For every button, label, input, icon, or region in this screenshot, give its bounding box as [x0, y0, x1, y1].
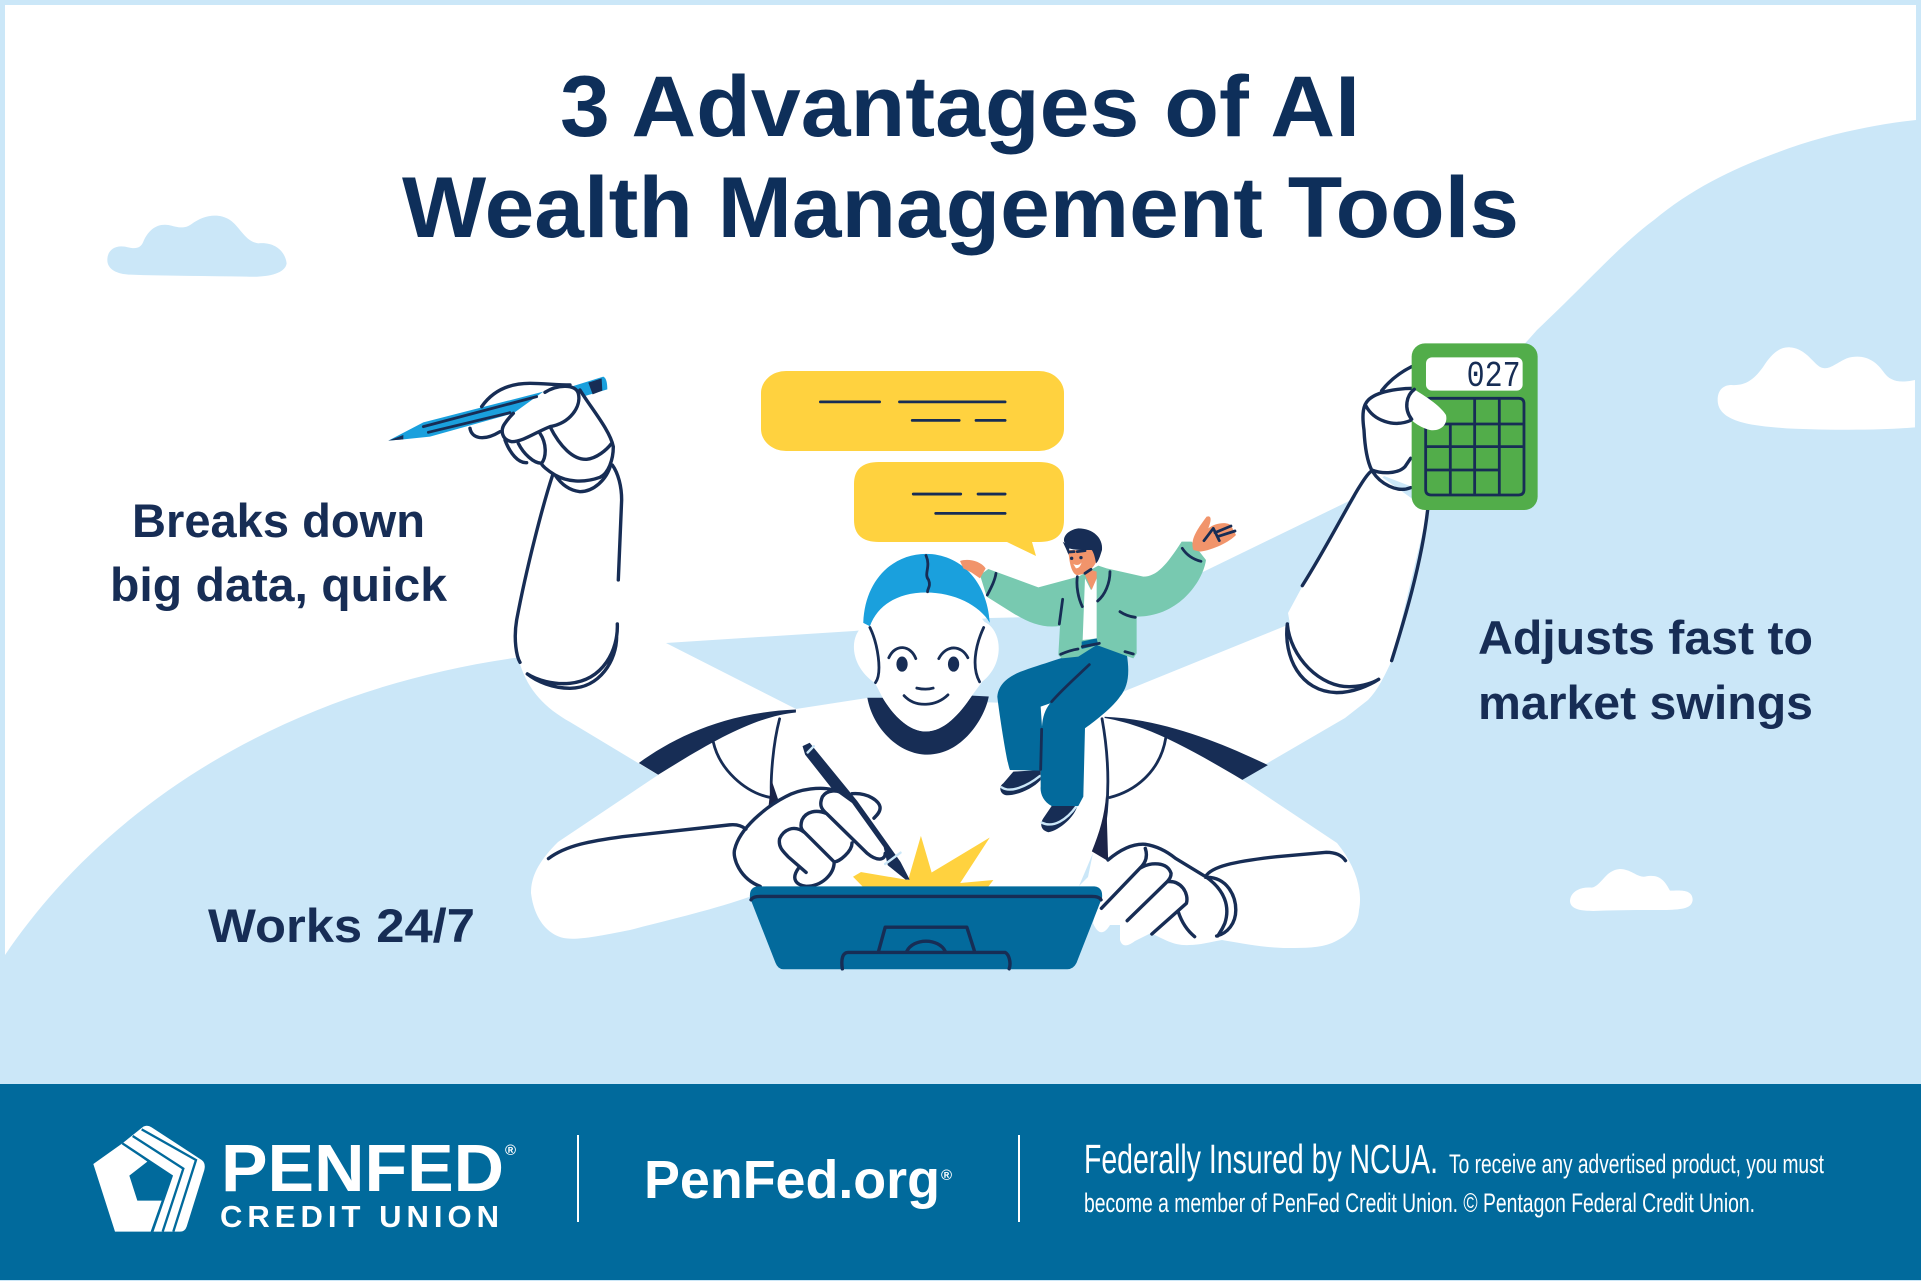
thumb over calculator — [1406, 389, 1446, 430]
cloud: upper left — [107, 216, 287, 277]
label: adjusts fast to market swings: Adjusts fast to — [1478, 611, 1813, 664]
pencil — [388, 377, 607, 441]
hand outlines — [470, 383, 613, 492]
label: adjusts fast to market swings — [1478, 611, 1813, 729]
logo mark — [93, 1126, 205, 1232]
tablet — [750, 886, 1102, 969]
speech bubble: bottom — [854, 462, 1064, 556]
logo wordmark: PENFED — [221, 1131, 504, 1206]
trousers — [997, 645, 1128, 806]
label: breaks down big data — [110, 494, 448, 611]
logo wordmark: CREDIT UNION — [220, 1199, 499, 1234]
head cap — [863, 554, 990, 626]
raised hand with pencil — [388, 377, 622, 688]
shirt and belt — [1083, 578, 1097, 640]
upper arm outline — [515, 465, 622, 688]
logo wordmark: ® — [505, 1142, 516, 1159]
nose and smile — [904, 688, 948, 704]
website: PenFed.org — [644, 1150, 940, 1210]
right shoulder band — [1105, 717, 1268, 780]
divider — [577, 1135, 579, 1222]
shoes — [1000, 770, 1078, 832]
robot head and torso details — [639, 554, 1268, 861]
robot body and arms silhouette — [515, 470, 1428, 948]
calculator: 027 — [1467, 356, 1521, 397]
title: Wealth Management Tools — [402, 160, 1519, 256]
cloud: right — [1718, 347, 1915, 430]
head seam — [926, 556, 929, 592]
hand and arm outline — [1363, 367, 1412, 487]
hand holding stylus — [548, 743, 910, 886]
face and ears — [854, 593, 999, 731]
disclaimer — [1084, 1136, 1824, 1218]
forearm line — [548, 825, 746, 859]
jacket creases — [987, 548, 1201, 654]
raised hand with calculator — [1287, 343, 1538, 693]
starburst — [846, 836, 993, 891]
label: works 24/7: Works 24/7 — [208, 899, 475, 952]
left shoulder band — [639, 710, 796, 775]
cloud: small lower right — [1570, 869, 1693, 911]
hands — [960, 516, 1236, 578]
hand outlines — [734, 788, 885, 886]
divider — [1018, 1135, 1020, 1222]
shoulder seams — [713, 719, 1166, 841]
small sky wedge beside the torso — [1079, 853, 1093, 886]
eyes and brows — [889, 648, 968, 672]
collar — [867, 696, 989, 755]
footer band — [0, 1084, 1921, 1280]
disclaimer: Federally Insured by NCUA. — [1084, 1136, 1438, 1182]
logo wordmark — [220, 1131, 516, 1234]
label: adjusts fast to market swings: market swings — [1478, 676, 1813, 729]
armpit shadows — [768, 780, 1108, 861]
head — [1068, 550, 1099, 590]
website: ® — [941, 1167, 952, 1184]
title: 3 Advantages of AI — [560, 59, 1360, 155]
label: breaks down big data: Breaks down — [132, 494, 425, 547]
ear lines — [870, 627, 984, 683]
speech bubble: top — [761, 371, 1064, 451]
man sitting on robot shoulder — [960, 516, 1236, 832]
calculator — [1412, 343, 1538, 510]
green jacket — [980, 542, 1206, 658]
hand resting on tablet — [1101, 844, 1345, 937]
label: breaks down big data: big data, quick — [110, 558, 448, 611]
stylus — [803, 743, 910, 880]
blue hill background — [5, 120, 1916, 1090]
title — [402, 59, 1519, 256]
